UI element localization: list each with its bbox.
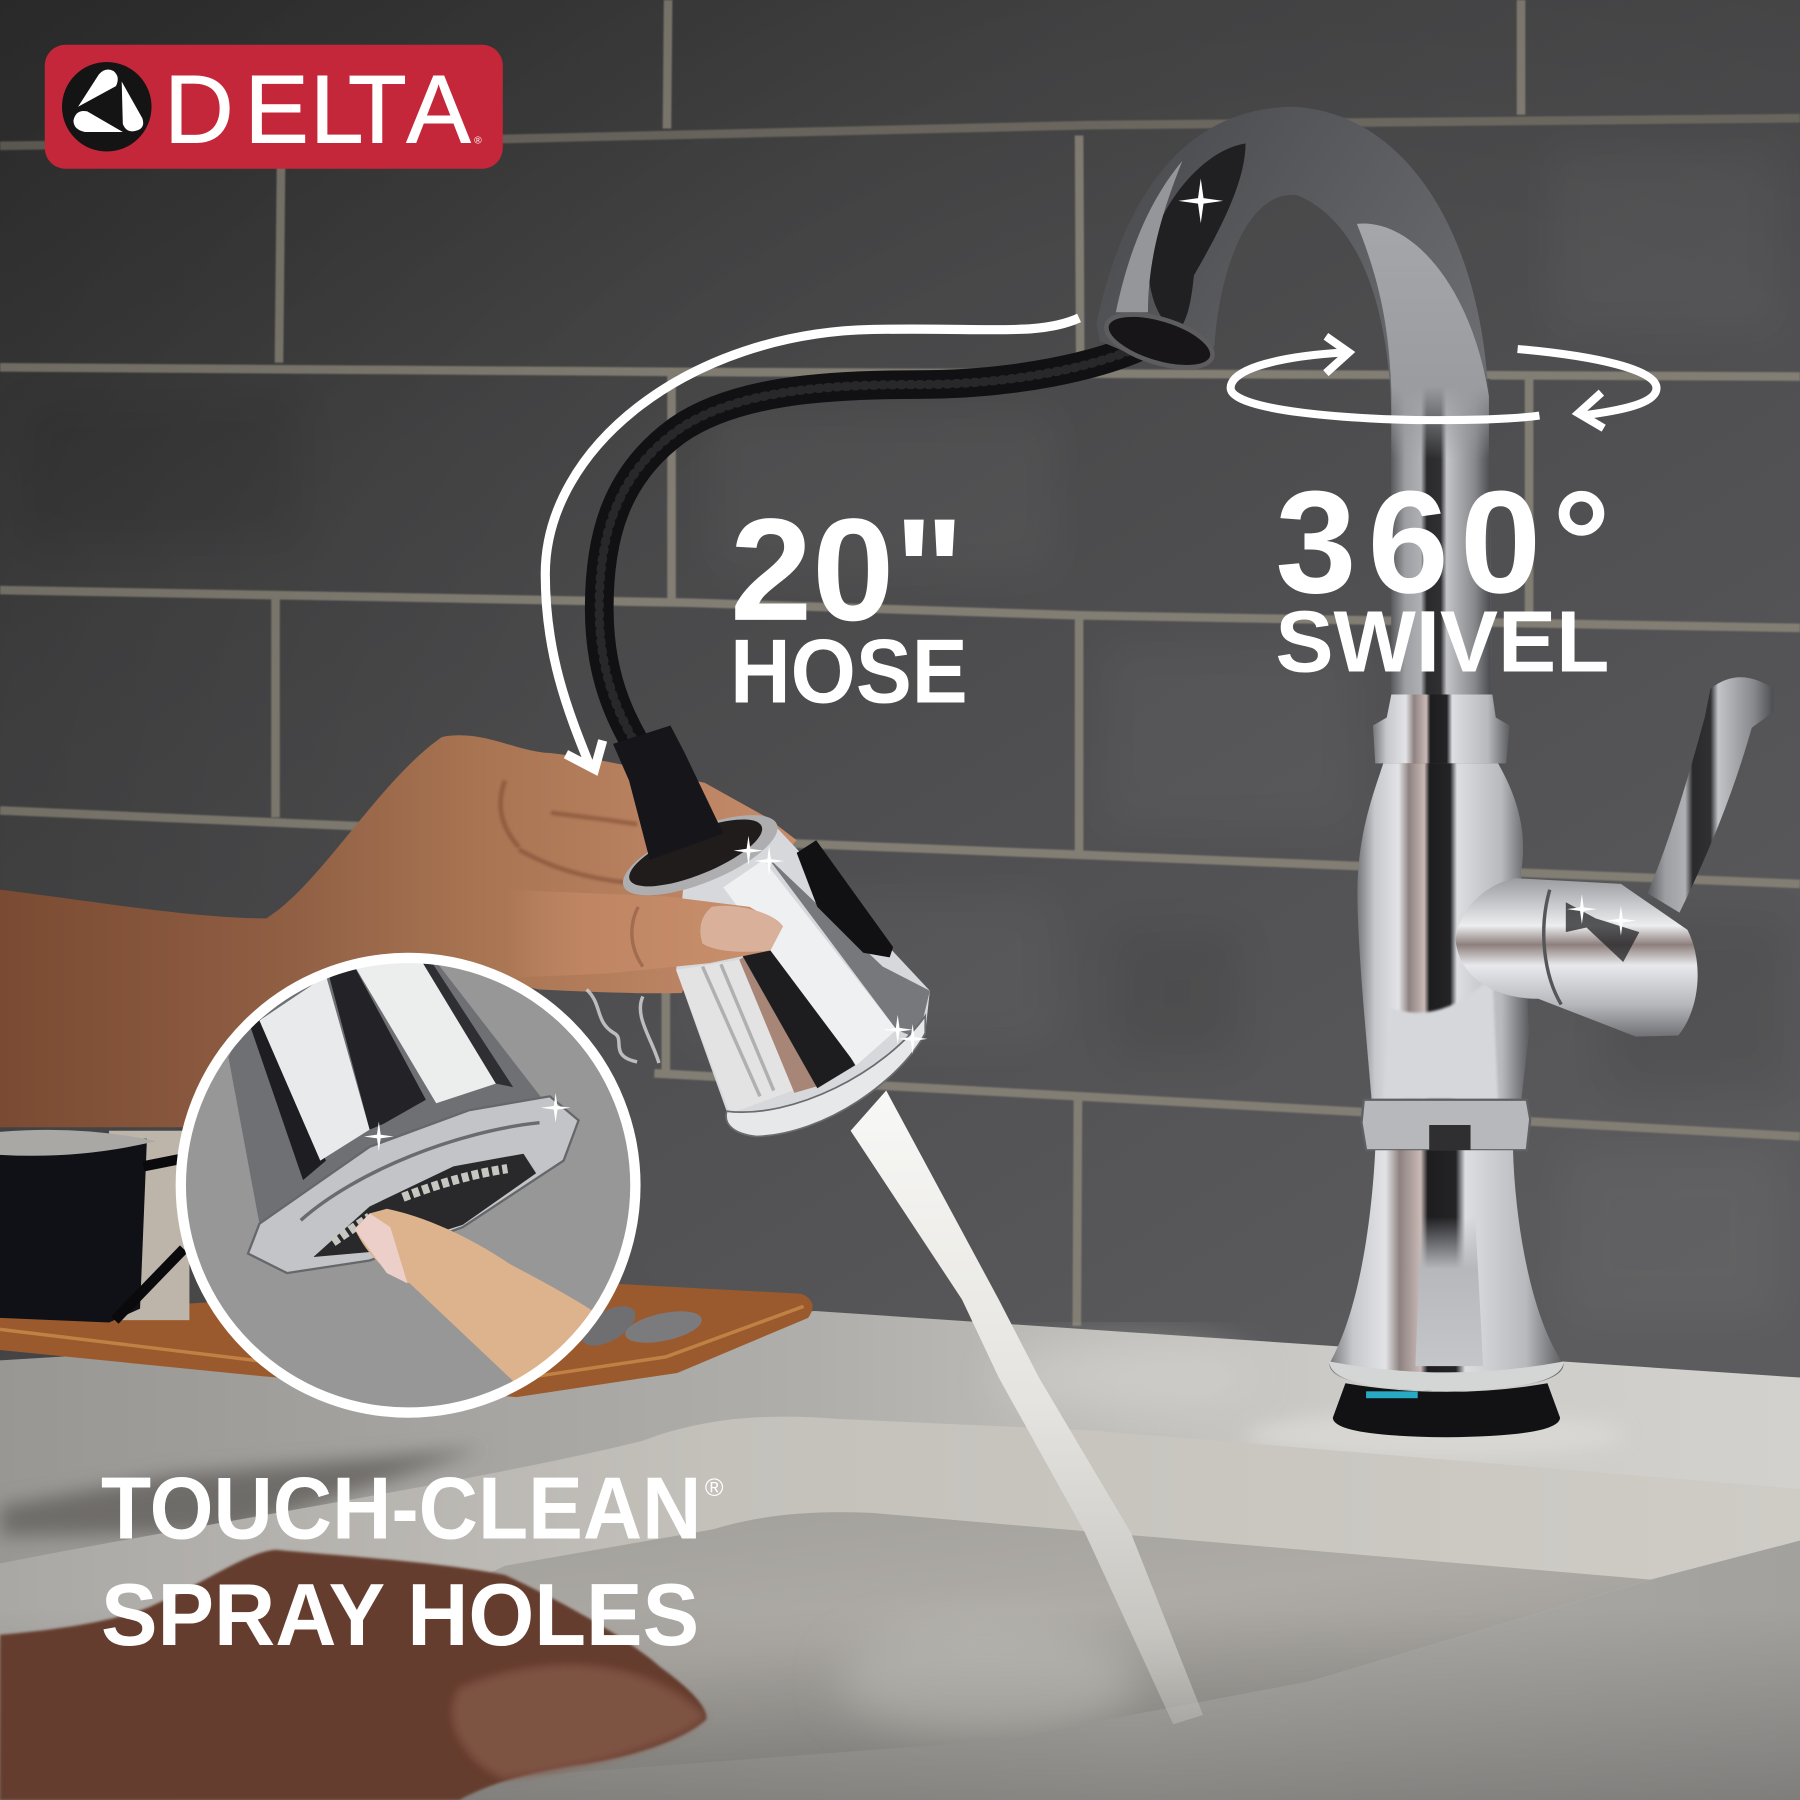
thumbnail — [700, 906, 783, 952]
head body — [676, 823, 930, 1136]
tile reflections — [587, 990, 659, 1063]
Delta logo: ® — [474, 135, 482, 146]
spout arc — [1096, 107, 1492, 700]
spout mouth — [1100, 304, 1219, 378]
Delta logo — [45, 45, 503, 169]
label: 360 degree swivel: SWIVEL — [1275, 594, 1609, 691]
sparkles — [734, 179, 1636, 1054]
inset circle: touch-clean spray holes — [181, 953, 635, 1413]
inset left dark strip — [250, 1016, 326, 1180]
rose reflection — [739, 955, 822, 1093]
collar — [1373, 695, 1510, 763]
stem — [1391, 379, 1490, 700]
thumb knuckle shadow — [632, 907, 643, 967]
hose connector — [613, 726, 723, 860]
body bulge — [1357, 763, 1529, 1102]
rim disc — [613, 799, 787, 912]
label: touch-clean spray holes: SPRAY HOLES — [101, 1565, 699, 1664]
swivel arrows — [1231, 336, 1657, 428]
wordmark: DELTA — [164, 56, 471, 163]
handle collar line — [1544, 890, 1561, 1004]
bright front band — [723, 860, 897, 1065]
elbow reflection — [1357, 224, 1489, 459]
LED indicator — [1366, 1391, 1418, 1398]
spray head — [613, 726, 930, 1136]
label: 360 degree swivel: 360° — [1275, 460, 1611, 623]
inset white ring — [181, 958, 635, 1413]
black base with light — [1333, 1383, 1560, 1437]
bottom lip — [726, 1016, 925, 1136]
inset sparkle — [364, 1122, 394, 1151]
inset dark band — [326, 959, 426, 1130]
inset right dark band — [420, 959, 513, 1087]
hose length arrow — [545, 318, 1079, 769]
lever — [1647, 677, 1774, 913]
label: touch-clean spray holes — [101, 1458, 724, 1664]
cream cup behind mug — [109, 1131, 189, 1320]
lower ring — [1361, 1100, 1530, 1150]
arm and back of hand — [0, 735, 797, 1127]
label: 20 inch hose: HOSE — [730, 622, 968, 723]
right chrome edge — [767, 856, 930, 1039]
blurred foreground hand — [0, 1550, 706, 1800]
bottom shade — [0, 1607, 1800, 1800]
body lower bright area — [1383, 976, 1498, 1100]
wooden tray — [0, 1283, 813, 1397]
inset spray face — [313, 1154, 536, 1257]
inset fingertip — [355, 1209, 595, 1381]
inset flange — [248, 1096, 579, 1273]
spout highlight — [1116, 161, 1182, 312]
inset flange shadow line — [301, 1123, 540, 1220]
base bell — [1329, 1150, 1564, 1391]
faucet — [1096, 107, 1774, 1437]
label: touch-clean spray holes: TOUCH-CLEAN — [101, 1458, 701, 1557]
sink front slab — [459, 1541, 1800, 1800]
spray nozzles — [333, 1169, 507, 1242]
rim collar — [622, 806, 770, 900]
handle dark reflection — [1566, 902, 1639, 962]
dark band — [743, 913, 855, 1088]
spout window — [1148, 143, 1246, 333]
mug — [0, 1130, 189, 1322]
thumb — [505, 890, 783, 978]
label: touch-clean spray holes: ® — [705, 1474, 724, 1502]
bell lip — [1329, 1361, 1564, 1391]
hand holding spray head — [0, 735, 797, 1127]
inset fingernail — [355, 1213, 408, 1283]
pull-down hose — [599, 340, 1154, 740]
sink rim — [0, 1417, 1800, 1642]
inset white band — [259, 976, 370, 1161]
flute groove — [703, 964, 774, 1096]
inset spray head body — [228, 953, 543, 1224]
sink basin — [287, 1512, 1651, 1800]
label: 20 inch hose: 20" — [730, 488, 964, 651]
label: 20 inch hose — [730, 488, 968, 723]
finger creases — [501, 781, 643, 884]
countertop — [0, 1311, 1800, 1800]
logo emblem — [62, 62, 152, 152]
inset second white band — [350, 959, 496, 1103]
left flute — [676, 960, 793, 1114]
ring shadow — [1429, 1125, 1471, 1150]
water stream — [851, 1091, 1203, 1724]
spray button — [797, 840, 893, 957]
bell lower bright — [1415, 1217, 1483, 1366]
handle arm — [1456, 878, 1698, 1037]
